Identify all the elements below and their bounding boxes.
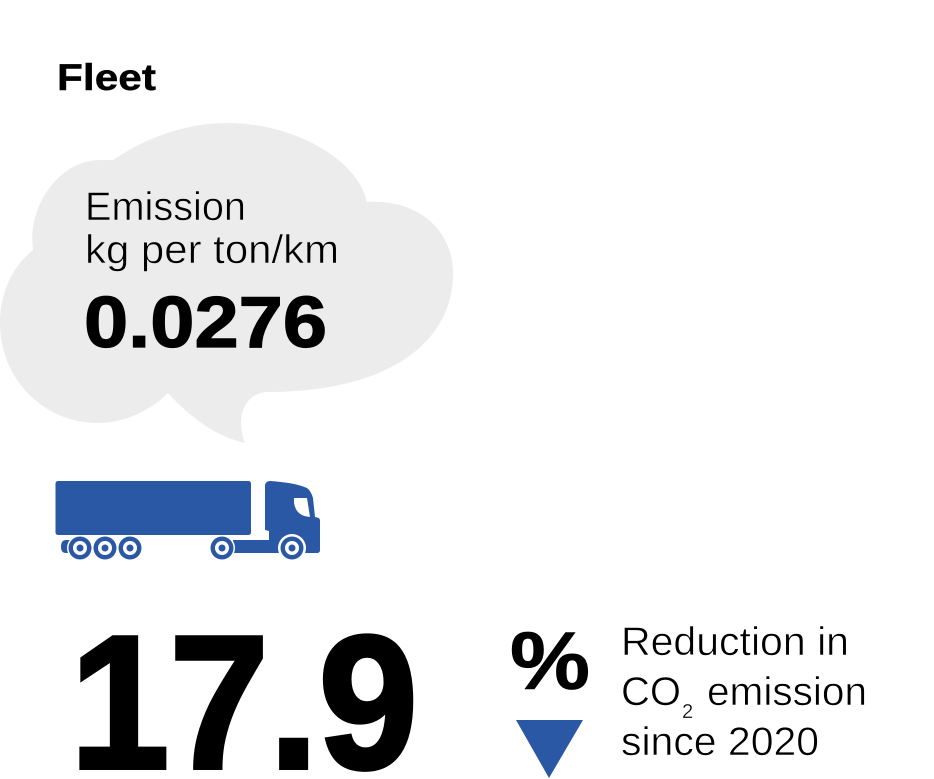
reduction text: Reduction in [621,620,849,664]
emission value: 0.0276 [84,283,327,363]
icon: truck [56,481,320,562]
panel: emission speech cloud [0,123,453,443]
reduction text: 2 [682,701,693,723]
cab window [294,498,310,517]
percent sign: % [510,616,590,707]
reduction text: since 2020 [621,720,819,764]
cab [233,481,320,553]
trailer [56,481,251,535]
icon: down triangle [516,720,583,778]
title: Fleet [57,57,156,98]
emission label [85,185,339,272]
reduction text: emission [707,670,867,714]
rear bumper [61,540,72,553]
reduction text [621,620,867,764]
reduction text: CO [621,670,681,714]
cloud shape [0,123,453,443]
emission label: kg per ton/km [85,228,339,272]
wheels [67,534,306,562]
emission label: Emission [85,185,246,229]
